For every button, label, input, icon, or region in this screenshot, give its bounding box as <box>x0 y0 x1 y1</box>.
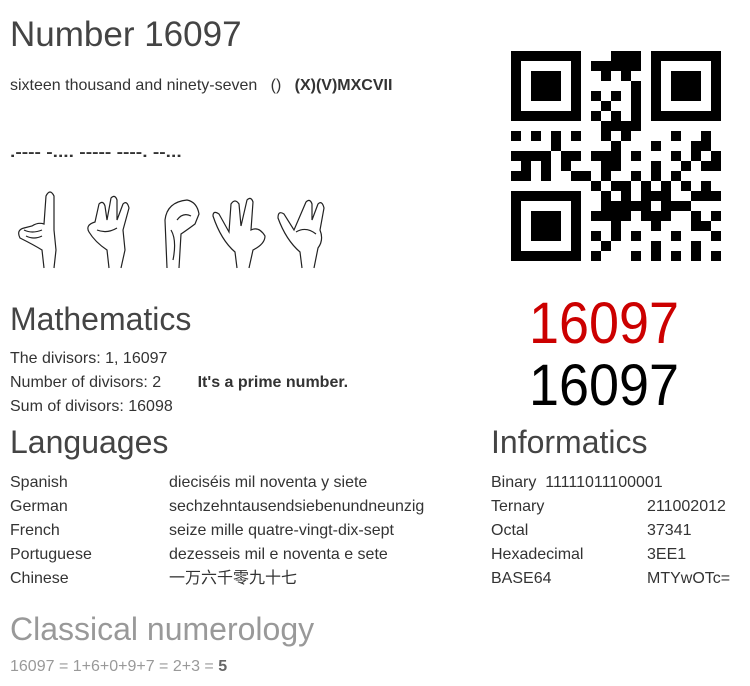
big number black: 16097 <box>529 353 679 418</box>
informatics table: Hexadecimal <box>491 546 583 563</box>
informatics table: BASE64 <box>491 570 551 587</box>
languages table: dieciséis mil noventa y siete <box>169 474 367 491</box>
heading: Informatics: Informatics <box>491 424 647 460</box>
mathematics facts <box>10 350 348 415</box>
languages table: Portuguese <box>10 546 92 563</box>
numerology calculation: 16097 = 1+6+0+9+7 = 2+3 = 5 <box>10 658 227 675</box>
morse code: .---- -.... ----- ----. --... <box>10 144 182 161</box>
languages table: dezesseis mil e noventa e sete <box>169 546 388 563</box>
informatics table: MTYwOTc= <box>647 570 730 587</box>
icon: sign language hands <box>18 191 325 268</box>
heading: Classical numerology: Classical numerology <box>10 611 314 647</box>
languages table: French <box>10 522 60 539</box>
heading: Languages: Languages <box>10 424 168 460</box>
informatics table: 37341 <box>647 522 692 539</box>
languages table: Spanish <box>10 474 68 491</box>
mathematics facts: The divisors: 1, 16097 <box>10 350 167 367</box>
informatics table: Ternary <box>491 498 544 515</box>
informatics table <box>491 474 730 587</box>
QR code <box>511 51 721 261</box>
informatics table: 211002012 <box>647 498 726 515</box>
languages table: 一万六千零九十七 <box>169 570 297 587</box>
informatics table: Octal <box>491 522 528 539</box>
languages table: sechzehntausendsiebenundneunzig <box>169 498 424 515</box>
mathematics facts: Number of divisors: 2 It's a prime number. <box>10 374 348 391</box>
languages table: German <box>10 498 68 515</box>
mathematics facts: Sum of divisors: 16098 <box>10 398 173 415</box>
languages table <box>10 474 424 587</box>
languages table: seize mille quatre-vingt-dix-sept <box>169 522 394 539</box>
big number red: 16097 <box>529 291 679 356</box>
title: Number 16097 <box>10 15 242 54</box>
informatics table: Binary 11111011100001 <box>491 474 663 491</box>
subtitle: words and roman numeral: sixteen thousand and ninety-seven () (X)(V)MXCVII <box>10 77 392 94</box>
informatics table: 3EE1 <box>647 546 686 563</box>
languages table: Chinese <box>10 570 69 587</box>
heading: Mathematics: Mathematics <box>10 301 191 337</box>
